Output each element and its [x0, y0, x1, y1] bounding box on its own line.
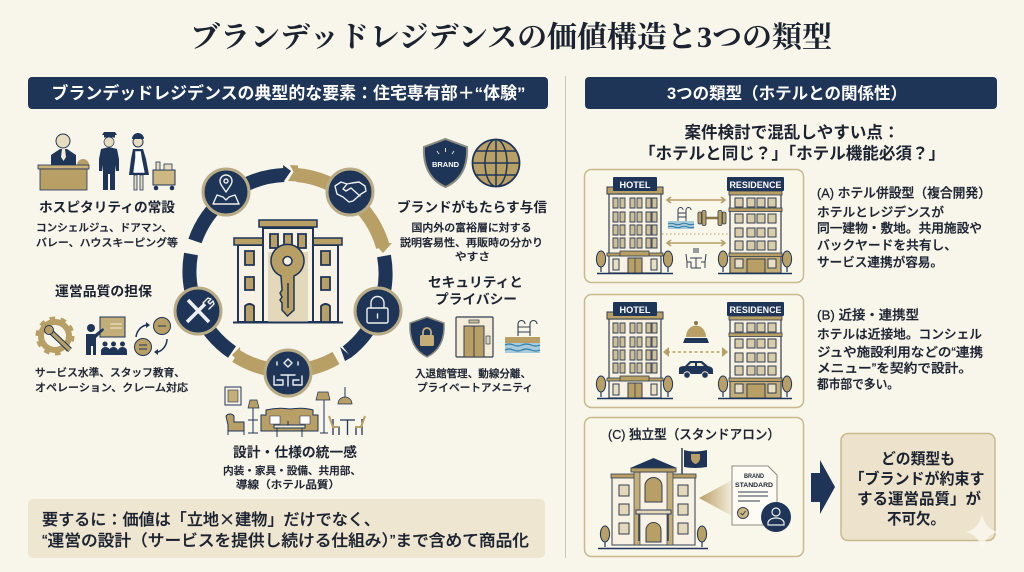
icon: doorman [99, 132, 119, 190]
icon: residence building: RESIDENCE [730, 305, 782, 315]
text block: type B: ホテルは近接地。コンシェル [817, 326, 982, 342]
icon: hotel building [596, 177, 673, 274]
icon: hotel building [596, 302, 673, 398]
text block: type A: サービス連携が容易。 [817, 254, 943, 270]
callout: conclusion: 不可欠。 [887, 509, 945, 528]
icon: housekeeper with cart [129, 133, 175, 190]
central building with key [233, 220, 343, 322]
icon: feedback cycle [134, 318, 170, 356]
text block: type A: (A) ホテル併設型（複合開発） [817, 186, 991, 200]
icon: dining table [686, 248, 706, 268]
icon: residence building [718, 302, 792, 398]
panel: type B [584, 294, 804, 408]
heading: left panel: ブランデッドレジデンスの典型的な要素：住宅専有部＋“体験” [52, 83, 526, 103]
text block: operations: サービス水準、スタッフ教育、 [35, 366, 185, 379]
arrow: linked services [663, 347, 728, 357]
question heading: 案件検討で混乱しやすい点： [684, 123, 900, 142]
text block: type A: 同一建物・敷地。共用施設や [817, 220, 982, 236]
text block: type B: (B) 近接・連携型 [817, 308, 919, 322]
node: tools [175, 288, 221, 334]
text block: security detail: 入退館管理、動線分離、 [415, 367, 531, 380]
icon group: hospitality staff [38, 132, 175, 190]
callout: conclusion: 「ブランドが約束す [850, 469, 984, 488]
icon: hotel building: HOTEL [620, 180, 651, 190]
text block: type A [817, 186, 991, 270]
icon: concierge bell [683, 321, 709, 343]
icon: security shield [410, 317, 444, 357]
icon: reception desk [38, 134, 89, 190]
text block: hospitality: ホスピタリティの常設 [39, 200, 175, 215]
icon: pool [668, 208, 694, 229]
node: lock [355, 288, 401, 334]
icon: standalone building with flag [598, 448, 708, 548]
text block: type A: バックヤードを共有し、 [817, 238, 957, 252]
title: ブランデッドレジデンスの価値構造と3つの類型 [190, 21, 832, 54]
icon group: operations [38, 317, 170, 356]
heading: type C: (C) 独立型（スタンドアロン） [608, 427, 780, 442]
text block: design consistency: 内装・家具・設備、共用部、 [223, 464, 361, 477]
text block: hospitality [36, 200, 179, 249]
icon: brand standard document: STANDARD [735, 482, 773, 489]
panel: type C [584, 418, 804, 556]
text block: hospitality: バレー、ハウスキーピング等 [36, 236, 179, 249]
text block: design consistency: 導線（ホテル品質） [236, 478, 340, 491]
panel: type A [584, 170, 804, 282]
text block: security heading: プライバシー [435, 292, 517, 307]
icon: brand standard document: BRAND [744, 473, 764, 480]
text block: brand trust [397, 199, 548, 263]
text block: security detail [415, 367, 533, 394]
heading: right panel: 3つの類型（ホテルとの関係性） [667, 84, 907, 103]
icon: car [679, 361, 713, 378]
node: handshake [327, 169, 373, 215]
text block: type B: 都市部で多い。 [817, 376, 899, 392]
text block: brand trust: 国内外の富裕層に対する [412, 221, 532, 234]
icon: hotel building: HOTEL [620, 305, 651, 315]
text block: type B [817, 308, 983, 392]
callout: conclusion [841, 434, 995, 540]
decorative sparkle [966, 514, 998, 550]
arrow: to conclusion [811, 460, 835, 514]
callout: summary: 要するに：価値は「立地×建物」だけでなく、 [42, 506, 380, 530]
arrow: shared facilities [662, 197, 728, 246]
text block: security detail: プライベートアメニティ [417, 382, 533, 394]
callout: conclusion: する運営品質」が [857, 489, 981, 508]
icon: pool ladder [505, 321, 540, 353]
text block: hospitality: コンシェルジュ、ドアマン、 [36, 222, 172, 234]
icon: dumbbell [698, 210, 726, 226]
heading: right panel [585, 77, 997, 109]
icon: globe [472, 140, 520, 186]
value cycle ring [183, 165, 392, 371]
text block: security heading [428, 275, 523, 307]
callout: summary: “運営の設計（サービスを提供し続ける仕組み）”まで含めて商品化 [42, 532, 529, 550]
node: map pin [203, 169, 249, 215]
text block: type B: ジュや施設利用などの“連携 [817, 344, 983, 360]
icon: residence building: RESIDENCE [730, 180, 782, 190]
panel divider [564, 76, 566, 558]
text block: operations [35, 366, 189, 394]
text block: design consistency: 設計・仕様の統一感 [233, 444, 358, 460]
text block: type A: ホテルとレジデンスが [817, 204, 944, 220]
icon: training session [86, 317, 127, 355]
icon: brand standard document [732, 466, 791, 532]
question heading: 「ホテルと同じ？」「ホテル機能必須？」 [639, 143, 945, 163]
icon: brand shield [424, 139, 467, 187]
icon: gear with wrench [38, 318, 72, 354]
arrow: brand standard pointer [699, 480, 732, 516]
text block: type B: メニュー”を契約で設計。 [817, 360, 972, 376]
text block: operations: オペレーション、クレーム対応 [35, 381, 189, 394]
text block: security heading: セキュリティと [428, 275, 523, 290]
callout: conclusion: どの類型も [881, 450, 955, 468]
icon group: furniture [225, 387, 365, 437]
text block: brand trust: ブランドがもたらす与信 [397, 199, 548, 215]
node: furniture [265, 350, 311, 396]
heading: left panel [28, 77, 548, 109]
heading: operation quality: 運営品質の担保 [55, 283, 153, 299]
callout: summary [28, 499, 545, 558]
text block: brand trust: 説明客易性、再販時の分かり [400, 236, 543, 249]
question heading [639, 123, 945, 163]
key [271, 244, 304, 316]
icon: brand shield: BRAND [432, 160, 460, 169]
text block: brand trust: やすさ [455, 251, 490, 263]
icon: residence building [718, 177, 792, 274]
text block: design consistency [223, 444, 361, 491]
icon: elevator [456, 317, 493, 357]
